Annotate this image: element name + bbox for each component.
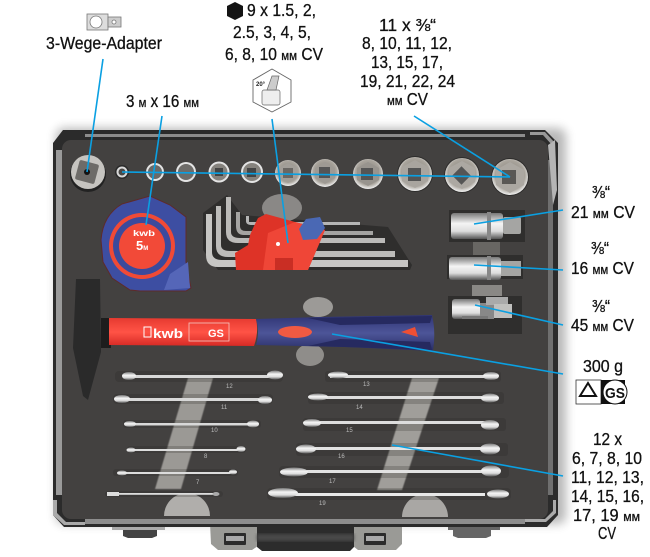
wrench 13	[325, 371, 501, 382]
wrench 15	[303, 418, 506, 431]
hammer head	[73, 279, 101, 400]
label: socket sizes	[360, 15, 455, 109]
handle blue	[256, 315, 434, 351]
size labels right: 17	[329, 479, 336, 485]
label: wrench sizes: 17, 19 мм	[573, 505, 640, 525]
label: 16 mm socket	[571, 238, 634, 278]
socket 16 long	[447, 255, 523, 280]
label: wrench sizes	[571, 429, 644, 543]
label: hammer weight: 300 g	[583, 356, 623, 376]
label: hex key sizes: 6, 8, 10 мм CV	[225, 44, 323, 64]
size labels right: 14	[356, 405, 363, 411]
size labels right: 15	[346, 428, 353, 434]
size labels left: 8	[204, 454, 208, 460]
size labels right: 19	[319, 501, 326, 507]
label: tape measure: 3 м x 16 мм	[126, 91, 199, 111]
size labels left: 7	[196, 480, 200, 486]
size labels right: 16	[338, 454, 345, 460]
adapter icon	[87, 14, 121, 30]
case shadow	[56, 128, 566, 524]
label: socket sizes: 11 x ⅜“	[379, 15, 436, 35]
icon: adapter	[70, 155, 106, 192]
11 sockets row and adapter	[70, 155, 529, 196]
size labels left	[196, 384, 233, 486]
blue hex badge	[299, 217, 325, 240]
label: 16 mm socket: 16 мм CV	[571, 258, 634, 278]
right sockets	[447, 210, 525, 334]
case frame	[53, 130, 558, 527]
label: socket sizes: мм CV	[387, 89, 428, 109]
tape measure: 5M	[136, 238, 148, 253]
label: 45 mm joint: ⅜“	[592, 296, 610, 316]
combination wrenches right	[267, 371, 511, 507]
socket 21	[397, 156, 433, 192]
label: 45 mm joint: 45 мм CV	[571, 315, 634, 335]
socket 15	[275, 160, 301, 186]
label: socket sizes: 13, 15, 17,	[371, 52, 443, 72]
handle red	[109, 318, 257, 346]
wrench 16	[296, 443, 508, 456]
label: hex key sizes: 9 x 1.5, 2,	[247, 0, 316, 20]
socket 12	[208, 162, 230, 182]
tape measure: kwb	[133, 229, 155, 238]
label: 21 mm socket: ⅜“	[592, 182, 610, 202]
label: 45 mm joint	[571, 296, 634, 335]
tape measure	[101, 196, 191, 291]
socket 19	[353, 159, 383, 189]
icon: 20 degree joint hexagon	[253, 69, 291, 112]
wrench 6	[105, 491, 223, 497]
size labels left: 12	[226, 384, 233, 390]
wrench 14	[308, 392, 504, 404]
wrench 12	[115, 370, 283, 382]
icon: 20 degree joint hexagon: 20°	[256, 82, 266, 88]
hammer: GS	[208, 328, 224, 340]
wrench 17	[279, 466, 509, 478]
label: wrench sizes: 11, 12, 13,	[571, 467, 644, 487]
size labels right: 13	[363, 382, 370, 388]
wrench 19	[267, 488, 511, 500]
joint socket	[448, 296, 522, 334]
hammer	[73, 279, 434, 400]
label: 21 mm socket	[571, 182, 635, 222]
label: wrench sizes: 12 x	[593, 429, 622, 449]
socket 8	[115, 165, 129, 179]
wrench 11	[113, 394, 273, 404]
foam finger recesses	[155, 240, 502, 517]
wrench 7	[113, 469, 238, 476]
red holder	[235, 214, 325, 270]
blue leader lines	[87, 59, 563, 476]
hex symbol	[227, 2, 243, 20]
socket 17	[311, 159, 339, 187]
label: 21 mm socket: 21 мм CV	[571, 202, 635, 222]
wrench 10	[123, 420, 261, 428]
case latches and handle	[112, 523, 500, 551]
size labels right	[319, 382, 370, 507]
wrench 8	[126, 446, 246, 453]
socket 22	[444, 157, 480, 193]
aluminium tool case	[53, 128, 566, 551]
label: 16 mm socket: ⅜“	[591, 238, 609, 258]
hammer: kwb	[153, 326, 183, 341]
combination wrenches left	[105, 370, 283, 497]
hex key set	[203, 194, 412, 270]
socket 13	[241, 161, 263, 183]
label: wrench sizes: CV	[598, 523, 616, 543]
socket 24	[491, 158, 529, 196]
label: socket sizes: 19, 21, 22, 24	[360, 71, 455, 91]
label: 3-way adapter: 3-Wege-Adapter	[46, 33, 162, 53]
icon: safety logos	[576, 380, 627, 404]
icon: safety logos: GS	[605, 385, 625, 402]
label: hex key sizes	[225, 0, 323, 64]
socket 21 long	[449, 210, 525, 242]
socket 10	[146, 163, 164, 181]
label: hex key sizes: 2.5, 3, 4, 5,	[233, 22, 311, 42]
label: wrench sizes: 6, 7, 8, 10	[572, 448, 642, 468]
socket 11	[176, 162, 196, 182]
foam insert	[62, 140, 548, 519]
size labels left: 10	[211, 428, 218, 434]
size labels left: 11	[221, 405, 228, 411]
label: socket sizes: 8, 10, 11, 12,	[362, 33, 452, 53]
